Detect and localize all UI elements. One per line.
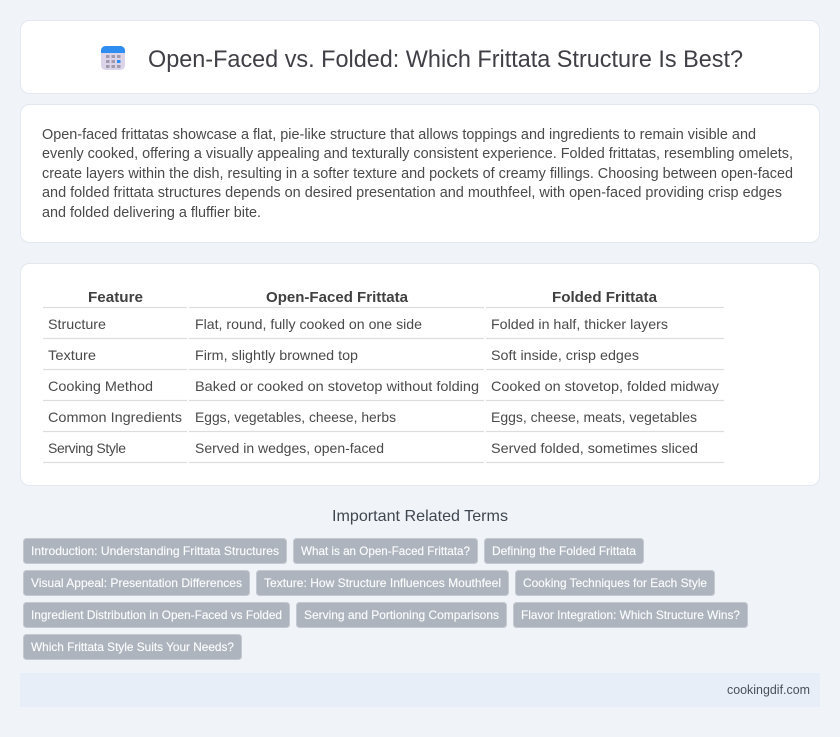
row: serving style: Served in wedges, open-faced — [195, 440, 384, 456]
row: serving style: Served folded, sometimes sliced — [491, 440, 698, 456]
row: cooking method: Cooking Method — [48, 378, 153, 394]
row: cooking method: Cooked on stovetop, folded midway — [491, 378, 719, 394]
footer bar — [20, 673, 820, 707]
panel: comparison table — [20, 264, 820, 486]
intro paragraph: and folded frittata structures depends on desired presentation and mouthfeel, with open-faced providing crisp edges — [42, 185, 782, 201]
row: structure: Flat, round, fully cooked on one side — [195, 316, 422, 332]
related term chips: Visual Appeal: Presentation Differences — [31, 576, 242, 590]
row: common ingredients: Eggs, vegetables, cheese, herbs — [195, 409, 396, 425]
panel: intro text — [20, 104, 820, 242]
row: cooking method: Baked or cooked on stovetop without folding — [195, 378, 479, 394]
related term chips: What is an Open-Faced Frittata? — [301, 544, 470, 558]
related term chips: Which Frittata Style Suits Your Needs? — [31, 640, 234, 654]
row: common ingredients: Eggs, cheese, meats, vegetables — [491, 409, 697, 425]
row: texture — [48, 347, 639, 363]
footer source: cookingdif.com — [727, 682, 810, 697]
intro paragraph: and folded delivering a fluffier bite. — [42, 205, 261, 221]
row: texture: Soft inside, crisp edges — [491, 347, 639, 363]
heading: important related terms: Important Related Terms — [332, 508, 508, 525]
related term chips: Introduction: Understanding Frittata Structures — [31, 544, 279, 558]
related term chips: Texture: How Structure Influences Mouthfeel — [264, 576, 501, 590]
row: cooking method — [48, 378, 719, 394]
related term chips: Serving and Portioning Comparisons — [304, 608, 499, 622]
icon: calendar — [101, 46, 125, 70]
related term chips — [24, 538, 748, 660]
row: texture: Texture — [48, 347, 96, 363]
related term chips: Ingredient Distribution in Open-Faced vs Folded — [31, 608, 282, 622]
row: serving style: Serving Style — [48, 440, 126, 456]
related term chips: Flavor Integration: Which Structure Wins? — [521, 608, 740, 622]
table header row — [88, 289, 658, 306]
row: common ingredients — [48, 409, 697, 425]
row: structure: Structure — [48, 316, 106, 332]
intro paragraph — [42, 127, 793, 221]
row: serving style — [48, 440, 698, 456]
table header row: Open-Faced Frittata — [266, 289, 409, 306]
row: structure: Folded in half, thicker layers — [491, 316, 668, 332]
title: Open-Faced vs. Folded: Which Frittata Structure Is Best? — [148, 46, 743, 73]
table header row: Folded Frittata — [552, 289, 658, 306]
row: structure — [48, 316, 668, 332]
intro paragraph: evenly cooked, offering a visually appealing and texturally consistent experience. Folded frittatas, resembling omelets, — [42, 146, 793, 162]
header panel — [20, 20, 820, 94]
intro paragraph: create layers within the dish, resulting in a softer texture and pockets of creamy fillings. Choosing between open-faced — [42, 166, 793, 182]
intro paragraph: Open-faced frittatas showcase a flat, pie-like structure that allows toppings and ingredients to remain visible and — [42, 127, 756, 143]
table header row: Feature — [88, 289, 143, 306]
row: texture: Firm, slightly browned top — [195, 347, 358, 363]
related term chips: Defining the Folded Frittata — [492, 544, 636, 558]
row: common ingredients: Common Ingredients — [48, 409, 182, 425]
related term chips: Cooking Techniques for Each Style — [523, 576, 707, 590]
